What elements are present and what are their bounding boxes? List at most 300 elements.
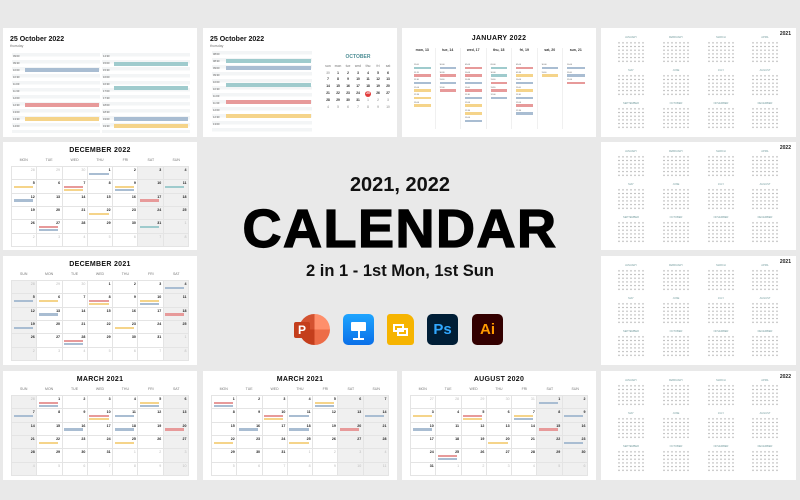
panel: December 2022 month: SUN [173,158,180,162]
month grid: 9 [83,410,85,414]
panel: day view with mini month [203,28,397,137]
icon: PowerPoint [294,314,330,345]
mini calendar october: sun [325,64,331,68]
month grid: 17 [157,195,161,199]
mini calendar october: 3 [357,71,359,75]
month grid: 10 [182,464,186,468]
heading: DECEMBER 2022 [69,147,131,154]
month grid: 6 [258,464,260,468]
timeline left: 09:00 [13,55,20,58]
panel: December 2021 month: SAT [173,272,180,276]
mini calendar october: 15 [336,84,340,88]
panel: January 2022 week view: 09:30 [516,72,521,74]
month grid: 8 [134,464,136,468]
month grid: 8 [558,410,560,414]
panel: December 2022 month: THU [96,158,104,162]
mini calendar october: 21 [326,91,330,95]
month grid: 31 [157,221,161,225]
timeline right: 16:30 [103,83,110,86]
month grid: 19 [157,424,161,428]
month grid: 9 [258,410,260,414]
month grid: 6 [359,397,361,401]
month grid: 21 [531,437,535,441]
panel: December 2021 month: WED [96,272,104,276]
month grid: 16 [81,424,85,428]
month grid: 11 [307,410,311,414]
panel: August 2020: THU [495,387,503,391]
month grid: 13 [56,195,60,199]
month grid: 12 [480,424,484,428]
mini calendar october: 29 [336,98,340,102]
panel: year 2021 (row 3): DECEMBER [758,330,772,333]
month grid: 19 [31,322,35,326]
panel: March 2021 (Sun start): MON [45,387,53,391]
heading: DECEMBER 2021 [69,261,131,268]
mini calendar october: mon [335,64,341,68]
month grid: 3 [184,450,186,454]
panel: year 2022 (row 2): SEPTEMBER [623,216,639,219]
panel: year 2021 (row 3): 2021 [780,259,791,265]
panel: January 2022 week view: 12:00 [440,87,445,89]
month grid [11,395,189,476]
month grid: 11 [455,424,459,428]
timeline left: 11:30 [13,90,19,93]
month grid: 12 [332,410,336,414]
timeline right [102,53,190,133]
month grid: 15 [231,424,235,428]
month grid: 28 [455,397,459,401]
mini calendar october: 10 [386,105,390,109]
timeline: 11:00 [213,95,219,98]
panel: January 2022 week view: 10:00 [490,72,496,74]
month grid [11,280,189,361]
month grid: 30 [132,335,136,339]
month grid: 25 [132,437,136,441]
month grid: 28 [31,168,35,172]
month grid: 18 [307,424,311,428]
month grid: 27 [357,437,361,441]
mini calendar october: 5 [377,71,379,75]
month grid: 7 [159,349,161,353]
month grid: 7 [83,295,85,299]
month grid: 8 [58,410,60,414]
month grid: 23 [132,322,136,326]
month grid: 1 [109,282,111,286]
panel: August 2020: WED [469,387,478,391]
panel: year 2021 (row 3): JANUARY [625,264,637,267]
timeline [212,51,312,133]
timeline: 13:00 [213,123,220,126]
panel: year 2022 (row 4): SEPTEMBER [623,445,639,448]
panel: January 2022 week view [402,28,596,137]
mini calendar october: 16 [346,84,350,88]
month grid: 4 [309,397,311,401]
month grid: 24 [157,322,161,326]
icon: Illustrator [472,314,503,345]
month grid: 8 [184,235,186,239]
month grid: 4 [83,235,85,239]
month grid: 25 [307,437,311,441]
mini calendar october: 25 [366,91,370,95]
month grid: 25 [455,450,459,454]
month grid: 23 [256,437,260,441]
month grid: 9 [334,464,336,468]
month grid: 5 [233,464,235,468]
month grid: 4 [184,282,186,286]
timeline right: 18:00 [103,104,110,107]
week columns: 12:00 [414,87,419,89]
panel: year 2022 (row 4): OCTOBER [670,445,682,448]
panel: December 2022 month: TUE [46,158,53,162]
panel: March 2021 (Sun start): FRI [148,387,154,391]
month grid: 23 [81,437,85,441]
panel: year 2022 (row 2): DECEMBER [758,216,772,219]
month grid: 20 [56,322,60,326]
panel: year 2021 (top): APRIL [761,36,769,39]
timeline left: 14:00 [13,125,20,128]
month grid: 28 [31,397,35,401]
timeline left: 10:30 [13,76,20,79]
panel: year 2022 (row 4): FEBRUARY [669,379,683,382]
month grid: 29 [556,450,560,454]
icon: Google Slides [387,314,414,345]
week columns: mon, 13 [416,48,429,52]
mini calendar october: 11 [366,77,370,81]
month grid: 15 [107,195,111,199]
week columns: 13:00 [414,102,419,104]
month grid: 15 [107,309,111,313]
mini calendar october: 24 [356,91,360,95]
panel: March 2021 (Mon start): WED [270,387,279,391]
timeline left: 12:00 [13,97,20,100]
panel: March 2021 (Sun start): SAT [173,387,180,391]
month grid: 4 [533,464,535,468]
panel: December 2022 month [3,142,197,250]
month grid: 14 [31,424,35,428]
panel: January 2022 week view: 12:00 [516,102,521,104]
panel: year 2022 (row 2): NOVEMBER [714,216,728,219]
panel: year 2022 (row 2): JUNE [673,183,679,186]
month grid: 22 [56,437,60,441]
month grid: 2 [482,464,484,468]
month grid: 3 [508,464,510,468]
week columns: 11:15 [414,72,419,74]
month grid: 13 [56,309,60,313]
timeline right: 18:30 [103,111,110,114]
month grid: 6 [58,181,60,185]
mini calendar october: 6 [347,105,349,109]
mini calendar october: 9 [347,77,349,81]
month grid: 13 [357,410,361,414]
timeline left: 13:00 [13,111,20,114]
timeline right: 15:30 [103,69,110,72]
month grid: 27 [430,397,434,401]
panel: December 2021 month: FRI [148,272,154,276]
month grid: 3 [58,235,60,239]
panel: year 2022 (row 2): FEBRUARY [669,150,683,153]
month grid: 28 [81,221,85,225]
heading: MARCH 2021 [77,376,123,383]
panel: January 2022 week view: sun, 21 [570,48,582,52]
panel: year 2021 (row 3): SEPTEMBER [623,330,639,333]
month grid: 31 [430,464,434,468]
panel: March 2021 (Mon start): THU [296,387,304,391]
panel: January 2022 week view: 11:30 [516,94,521,96]
mini calendar october: 23 [346,91,350,95]
panel: day view 25 October 2022: thursday [10,44,23,48]
panel: August 2020: FRI [522,387,527,391]
month grid [410,395,588,476]
panel: January 2022 week view: 11:00 [516,87,521,89]
month grid: 1 [233,397,235,401]
mini calendar october: 20 [386,84,390,88]
panel: year 2021 (top): AUGUST [760,69,770,72]
mini calendar october: 2 [377,98,379,102]
month grid: 9 [134,295,136,299]
panel: August 2020: TUE [445,387,452,391]
mini calendar october: 3 [387,98,389,102]
month grid: 26 [332,437,336,441]
panel: year 2022 (row 4): 2022 [780,374,791,380]
panel: year 2021 (top): MARCH [716,36,726,39]
month grid: 4 [83,349,85,353]
month grid: 17 [107,424,111,428]
month grid: 2 [258,397,260,401]
panel: year 2021 (row 3): APRIL [761,264,769,267]
month grid: 1 [184,221,186,225]
month grid: 4 [384,450,386,454]
panel: year 2021 (row 3) [601,256,796,365]
month grid: 31 [531,397,535,401]
panel: January 2022 week view: 11:00 [465,87,470,89]
panel: year 2021 (top): 2021 [780,31,791,37]
timeline right: 19:00 [103,118,110,121]
panel: year 2022 (row 2): MARCH [716,150,726,153]
month grid: 11 [132,410,136,414]
month grid: 21 [81,322,85,326]
mini calendar october: 14 [326,84,330,88]
panel: year 2021 (row 3): AUGUST [760,297,770,300]
panel: year 2021 (row 3): MARCH [716,264,726,267]
month grid: 30 [81,450,85,454]
panel: year 2022 (row 4): JUNE [673,412,679,415]
week columns: 11:30 [414,79,419,81]
panel: January 2022 week view: fri, 19 [520,48,529,52]
panel: year 2022 (row 2): AUGUST [760,183,770,186]
month grid: 13 [182,410,186,414]
month grid: 20 [56,208,60,212]
heading: 25 October 2022 [210,36,264,43]
mini calendar october: 12 [376,77,380,81]
month grid: 30 [256,450,260,454]
panel: year 2022 (row 2): JANUARY [625,150,637,153]
month grid: 5 [159,397,161,401]
panel: March 2021 (Mon start): MON [220,387,228,391]
panel: January 2022 week view: 10:30 [440,72,445,74]
panel: January 2022 week view: 11:30 [465,94,470,96]
month grid: 6 [58,295,60,299]
month grid: 26 [31,335,35,339]
month grid: 2 [584,397,586,401]
month grid: 5 [33,295,35,299]
month grid: 4 [134,397,136,401]
panel: December 2021 month: MON [45,272,53,276]
month grid: 26 [157,437,161,441]
panel: year 2021 (row 3): FEBRUARY [669,264,683,267]
panel: year 2021 (top): SEPTEMBER [623,102,639,105]
month grid: 18 [182,309,186,313]
panel: year 2022 (row 4): MARCH [716,379,726,382]
month grid: 7 [384,397,386,401]
panel: year 2022 (row 4): APRIL [761,379,769,382]
heading: day view title: 25 October 2022 [10,36,64,43]
panel: year 2022 (row 2): OCTOBER [670,216,682,219]
panel: January 2022 week view: 10:00 [465,72,470,74]
month grid: 24 [107,437,111,441]
panel: January 2022 week view: 09:00 [516,64,521,66]
timeline left: 13:30 [13,118,20,121]
mini calendar october: fri [376,64,380,68]
month grid: 8 [109,181,111,185]
panel: August 2020: SAT [547,387,553,391]
panel: year 2021 (top): JUNE [673,69,679,72]
panel: year 2022 (row 4): JULY [718,412,724,415]
panel: year 2022 (row 2): APRIL [761,150,769,153]
heading: JANUARY 2022 [472,35,526,42]
timeline left: 11:00 [13,83,19,86]
timeline left: 09:30 [13,62,20,65]
month grid: 5 [58,464,60,468]
month grid: 1 [184,335,186,339]
month grid: 6 [83,464,85,468]
month grid: 28 [531,450,535,454]
mini calendar october: 1 [337,71,339,75]
month grid: 20 [182,424,186,428]
month grid: 4 [33,464,35,468]
month grid: 5 [109,235,111,239]
panel: year 2022 (row 4): JANUARY [625,379,637,382]
month grid: 22 [231,437,235,441]
mini calendar october: 8 [337,77,339,81]
month grid: 10 [430,424,434,428]
month grid: 1 [558,397,560,401]
mini calendar october: 6 [387,71,389,75]
title: CALENDAR: CALENDAR [242,199,558,259]
month grid: 6 [134,235,136,239]
panel: December 2021 month [3,256,197,365]
panel: year 2022 (row 4): AUGUST [760,412,770,415]
month grid: 8 [233,410,235,414]
month grid: 18 [182,195,186,199]
month grid: 20 [357,424,361,428]
panel: December 2021 month: TUE [71,272,78,276]
panel: year 2022 (row 4): DECEMBER [758,445,772,448]
panel: March 2021 (Sun start): SUN [20,387,27,391]
heading: AUGUST 2020 [474,376,524,383]
timeline left [12,53,100,133]
panel: December 2022 month: FRI [123,158,128,162]
month grid: 2 [33,235,35,239]
mini calendar october: 8 [367,105,369,109]
panel: August 2020 [402,371,596,480]
mini calendar october: 7 [357,105,359,109]
panel: year 2021 (top): MAY [628,69,634,72]
panel: January 2022 week view: 11:00 [490,79,495,81]
panel: year 2021 (row 3): MAY [628,297,634,300]
month grid: 5 [33,181,35,185]
month grid: 7 [109,464,111,468]
month grid: 1 [134,450,136,454]
month grid: 30 [506,397,510,401]
month grid: 17 [281,424,285,428]
month grid: 16 [256,424,260,428]
month grid: 18 [455,437,459,441]
timeline left: 12:30 [13,104,20,107]
mini calendar october: 2 [347,71,349,75]
month grid: 17 [157,309,161,313]
timeline right: 17:00 [103,90,110,93]
panel: January 2022 week view: thu, 18 [493,48,504,52]
panel: December 2022 month: WED [70,158,79,162]
week columns: 12:30 [414,94,419,96]
month grid: 19 [31,208,35,212]
month grid: 26 [480,450,484,454]
month grid: 7 [33,410,35,414]
panel: January 2022 week view: 12:30 [516,110,521,112]
month grid: 6 [584,464,586,468]
panel: year 2022 (row 2) [601,142,796,250]
panel: year 2021 (top): DECEMBER [758,102,772,105]
month grid: 10 [281,410,285,414]
month grid: 21 [81,208,85,212]
month grid: 4 [457,410,459,414]
month grid: 8 [109,295,111,299]
mini calendar october: 28 [326,98,330,102]
month grid: 29 [56,168,60,172]
month grid: 9 [584,410,586,414]
panel: March 2021 (Mon start): SAT [348,387,354,391]
month grid: 1 [457,464,459,468]
panel: January 2022 week view: 10:00 [542,64,547,66]
month grid: 7 [533,410,535,414]
month grid: 5 [109,349,111,353]
icon: Keynote [343,314,374,345]
month grid: 30 [582,450,586,454]
subtitle: 2 in 1 - 1st Mon, 1st Sun [306,262,494,280]
panel: year 2022 (row 2): JULY [718,183,724,186]
panel: December 2022 month: MON [20,158,28,162]
panel: January 2022 week view: 10:30 [465,79,470,81]
mini calendar october: 31 [356,98,360,102]
month grid [11,166,189,247]
mini calendar october: 26 [376,91,380,95]
month grid: 5 [558,464,560,468]
panel: March 2021 (Sun start): THU [122,387,129,391]
panel: December 2022 month: SAT [148,158,154,162]
panel: March 2021 (Sun start): TUE [71,387,78,391]
month grid: 31 [281,450,285,454]
month grid: 30 [132,221,136,225]
panel: day view with mini month: thursday [210,44,223,48]
panel: January 2022 week view: 10:00 [516,79,521,81]
month grid: 24 [281,437,285,441]
month grid: 16 [132,309,136,313]
mini calendar october: OCTOBER [346,54,370,60]
month grid: 8 [184,349,186,353]
month grid: 3 [109,397,111,401]
week columns [410,48,436,129]
month grid: 8 [309,464,311,468]
